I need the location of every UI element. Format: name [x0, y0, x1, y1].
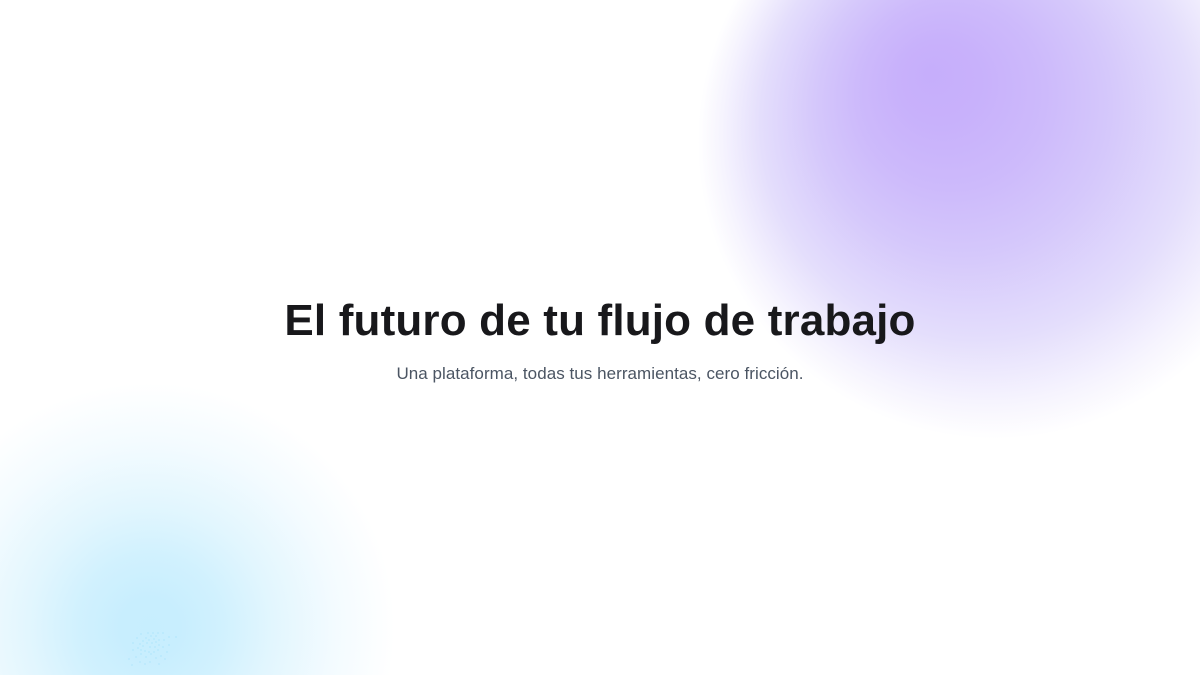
subtitle: Una plataforma, todas tus herramientas, cero fricción. [396, 364, 804, 383]
purple gradient blob [690, 0, 1200, 445]
title: El futuro de tu flujo de trabajo [284, 296, 916, 345]
dot cluster [128, 632, 176, 666]
blue gradient blob [0, 375, 400, 675]
